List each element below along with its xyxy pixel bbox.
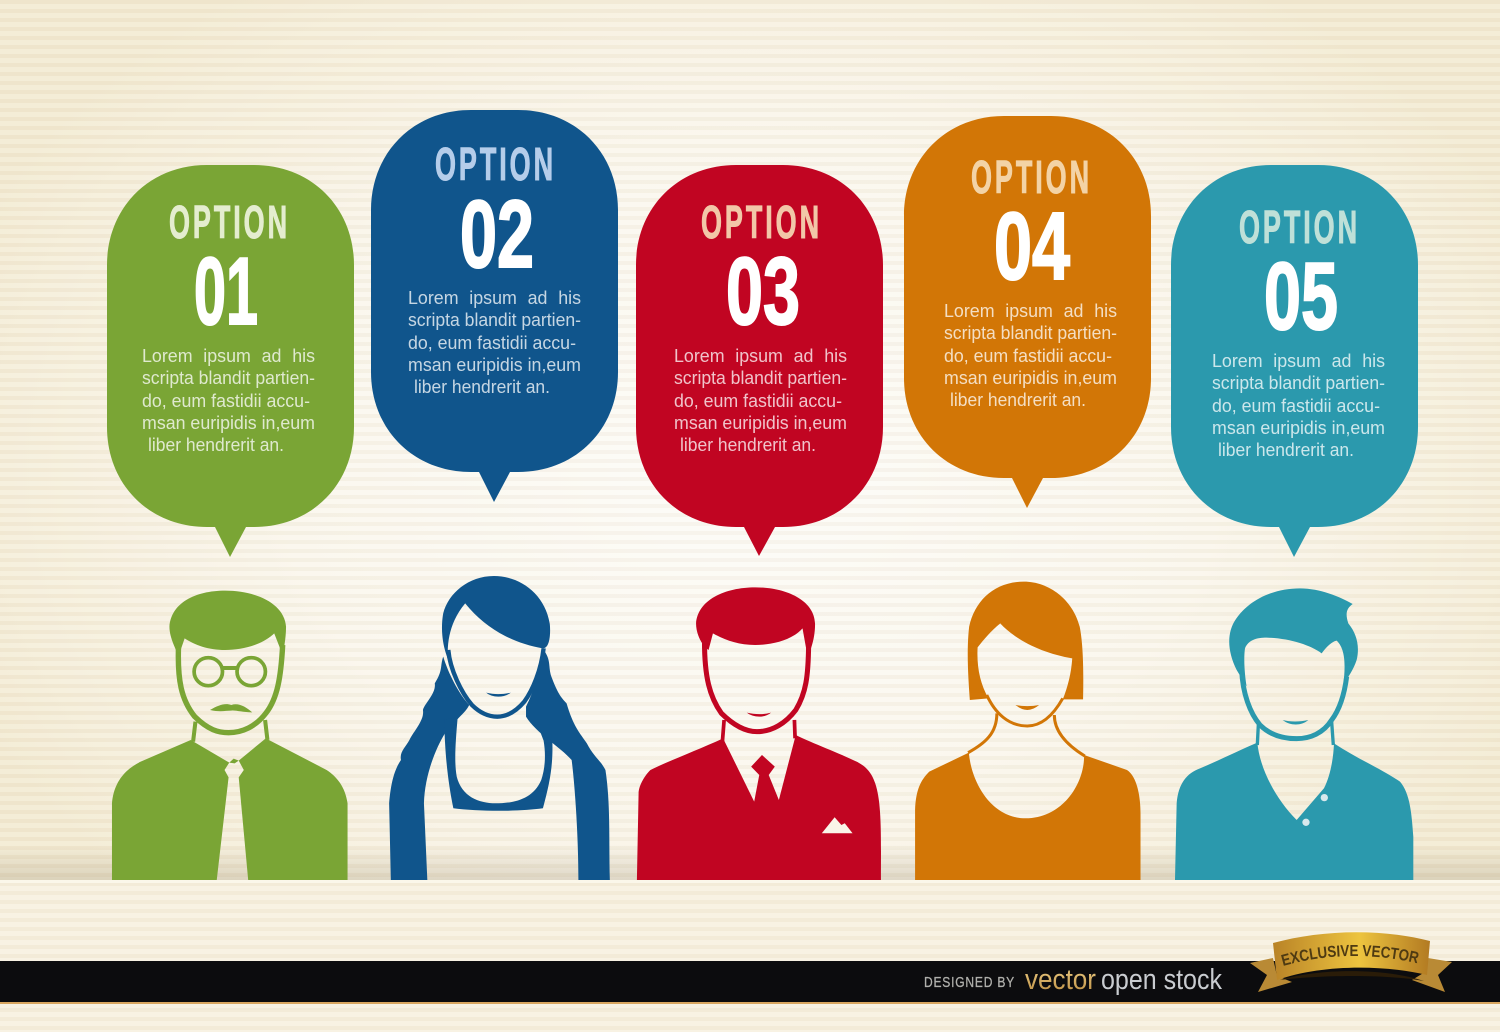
heading: option 05 bbox=[1239, 201, 1360, 350]
text block: option 04: msan euripidis in,eum bbox=[944, 367, 1117, 388]
panel: option 01 speech bubble bbox=[107, 165, 354, 557]
text block: option 04: scripta blandit partien- bbox=[944, 322, 1117, 343]
heading: option 04 bbox=[971, 151, 1092, 300]
text block: option 02 bbox=[408, 287, 581, 397]
text block: option 05: msan euripidis in,eum bbox=[1212, 417, 1385, 438]
text block: option 05: do, eum fastidii accu- bbox=[1212, 395, 1380, 416]
text block: option 02: liber hendrerit an. bbox=[414, 376, 550, 397]
icon: man in suit with pocket square bbox=[637, 587, 881, 880]
heading: option 01 bbox=[169, 196, 290, 345]
heading: option 02: 02 bbox=[460, 181, 534, 288]
credit text: DESIGNED BY bbox=[924, 974, 1015, 991]
text block: option 03 bbox=[674, 345, 847, 455]
heading: option 05: OPTION bbox=[1239, 201, 1360, 253]
text block: option 03: msan euripidis in,eum bbox=[674, 412, 847, 433]
ribbon label: EXCLUSIVE VECTOR bbox=[1281, 944, 1418, 966]
panel: option 04 speech bubble bbox=[904, 116, 1151, 508]
heading: option 05: 05 bbox=[1264, 243, 1338, 350]
heading: option 04: 04 bbox=[994, 193, 1070, 300]
icon: woman with long braided hair bbox=[389, 576, 610, 880]
heading: option 01: 01 bbox=[194, 238, 258, 345]
text block: option 01: do, eum fastidii accu- bbox=[142, 390, 310, 411]
heading: option 04: OPTION bbox=[971, 151, 1092, 203]
text block: option 04: Lorem ipsum ad his bbox=[944, 300, 1117, 321]
footer bar bbox=[0, 961, 1500, 1004]
heading: option 02 bbox=[435, 138, 556, 288]
text block: option 01 bbox=[142, 345, 315, 455]
text block: option 05: liber hendrerit an. bbox=[1218, 439, 1354, 460]
panel: option 03 speech bubble bbox=[636, 165, 883, 556]
panel: option 02 speech bubble bbox=[371, 110, 618, 502]
icon: gold ribbon badge bbox=[1250, 932, 1452, 992]
text block: option 03: do, eum fastidii accu- bbox=[674, 390, 842, 411]
heading: option 02: OPTION bbox=[435, 138, 556, 190]
credit text bbox=[924, 964, 1222, 996]
text block: option 05: Lorem ipsum ad his bbox=[1212, 350, 1385, 371]
icon: man with glasses, moustache and tie bbox=[112, 591, 348, 880]
text block: option 02: msan euripidis in,eum bbox=[408, 354, 581, 375]
text block: option 02: scripta blandit partien- bbox=[408, 309, 581, 330]
heading: option 01: OPTION bbox=[169, 196, 290, 248]
text block: option 02: Lorem ipsum ad his bbox=[408, 287, 581, 308]
icon: pocket square bbox=[822, 817, 853, 833]
heading: option 03: OPTION bbox=[701, 196, 822, 248]
text block: option 01: scripta blandit partien- bbox=[142, 367, 315, 388]
text block: option 04 bbox=[944, 300, 1117, 410]
text block: option 03: scripta blandit partien- bbox=[674, 367, 847, 388]
text block: option 01: liber hendrerit an. bbox=[148, 434, 284, 455]
text block: option 02: do, eum fastidii accu- bbox=[408, 332, 576, 353]
icon: young man with quiff and v-neck bbox=[1175, 588, 1413, 880]
text block: option 03: Lorem ipsum ad his bbox=[674, 345, 847, 366]
credit text: vector bbox=[1025, 964, 1096, 996]
text block: option 01: msan euripidis in,eum bbox=[142, 412, 315, 433]
panel: option 05 speech bubble bbox=[1171, 165, 1418, 557]
credit text: open stock bbox=[1101, 964, 1222, 996]
icon: woman with bob haircut bbox=[915, 582, 1141, 880]
heading: option 03: 03 bbox=[726, 238, 800, 345]
text block: option 05: scripta blandit partien- bbox=[1212, 372, 1385, 393]
text block: option 04: liber hendrerit an. bbox=[950, 389, 1086, 410]
text block: option 04: do, eum fastidii accu- bbox=[944, 345, 1112, 366]
text block: option 05 bbox=[1212, 350, 1385, 460]
text block: option 03: liber hendrerit an. bbox=[680, 434, 816, 455]
text block: option 01: Lorem ipsum ad his bbox=[142, 345, 315, 366]
heading: option 03 bbox=[701, 196, 822, 345]
